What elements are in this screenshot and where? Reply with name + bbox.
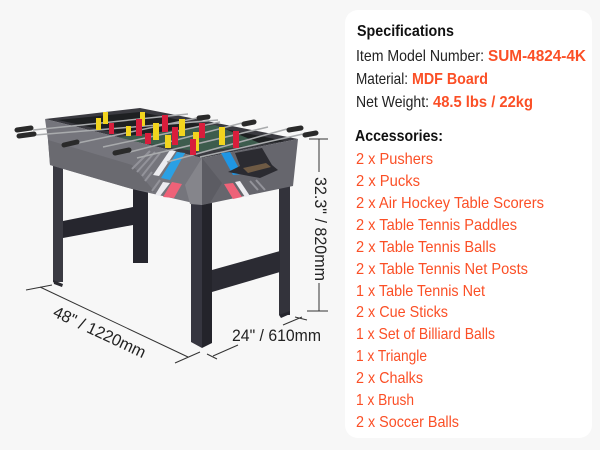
players	[96, 112, 225, 151]
list: accessories: 2 x Soccer Balls	[356, 414, 459, 431]
text: material: Material:	[356, 71, 408, 88]
list: accessories: 2 x Pucks	[356, 173, 420, 190]
side panels	[45, 119, 202, 205]
table surface	[45, 108, 298, 158]
list: accessories: 2 x Table Tennis Net Posts	[356, 261, 528, 278]
cup holder	[228, 148, 278, 178]
side stretchers	[212, 251, 280, 292]
stripes	[132, 150, 265, 199]
dimension: height	[307, 139, 329, 311]
panel: specifications	[345, 10, 592, 438]
text: model number: Item Model Number:	[356, 48, 484, 65]
list: accessories: 1 x Brush	[356, 392, 414, 409]
list: accessories	[356, 151, 544, 431]
front leg	[191, 200, 212, 348]
back legs	[53, 165, 290, 318]
list: accessories: 2 x Table Tennis Paddles	[356, 217, 517, 234]
list: accessories: 2 x Chalks	[356, 370, 423, 387]
dimension: width	[207, 317, 321, 359]
heading: specifications: Specifications	[357, 23, 454, 40]
text: material: MDF Board	[412, 71, 488, 88]
rods	[33, 114, 303, 162]
list: accessories: 2 x Table Tennis Balls	[356, 239, 496, 256]
list: accessories: 2 x Cue Sticks	[356, 304, 448, 321]
label: height: 32.3" / 820mm	[311, 177, 329, 281]
list: accessories: 2 x Air Hockey Table Scorers	[356, 195, 544, 212]
text: net weight: 48.5 lbs / 22kg	[433, 94, 533, 111]
list: accessories: 2 x Pushers	[356, 151, 433, 168]
list: accessories: 1 x Table Tennis Net	[356, 283, 485, 300]
list: accessories: 1 x Triangle	[356, 348, 427, 365]
label: length: 48" / 1220mm	[50, 303, 149, 362]
handles	[17, 117, 316, 153]
label: width: 24" / 610mm	[232, 327, 321, 345]
text: net weight: Net Weight:	[356, 94, 429, 111]
dimension: length	[26, 285, 200, 363]
heading: accessories: Accessories:	[355, 128, 443, 145]
text: model number: SUM-4824-4K	[488, 48, 586, 65]
list: accessories: 1 x Set of Billiard Balls	[356, 326, 495, 343]
foosball table	[17, 108, 316, 348]
